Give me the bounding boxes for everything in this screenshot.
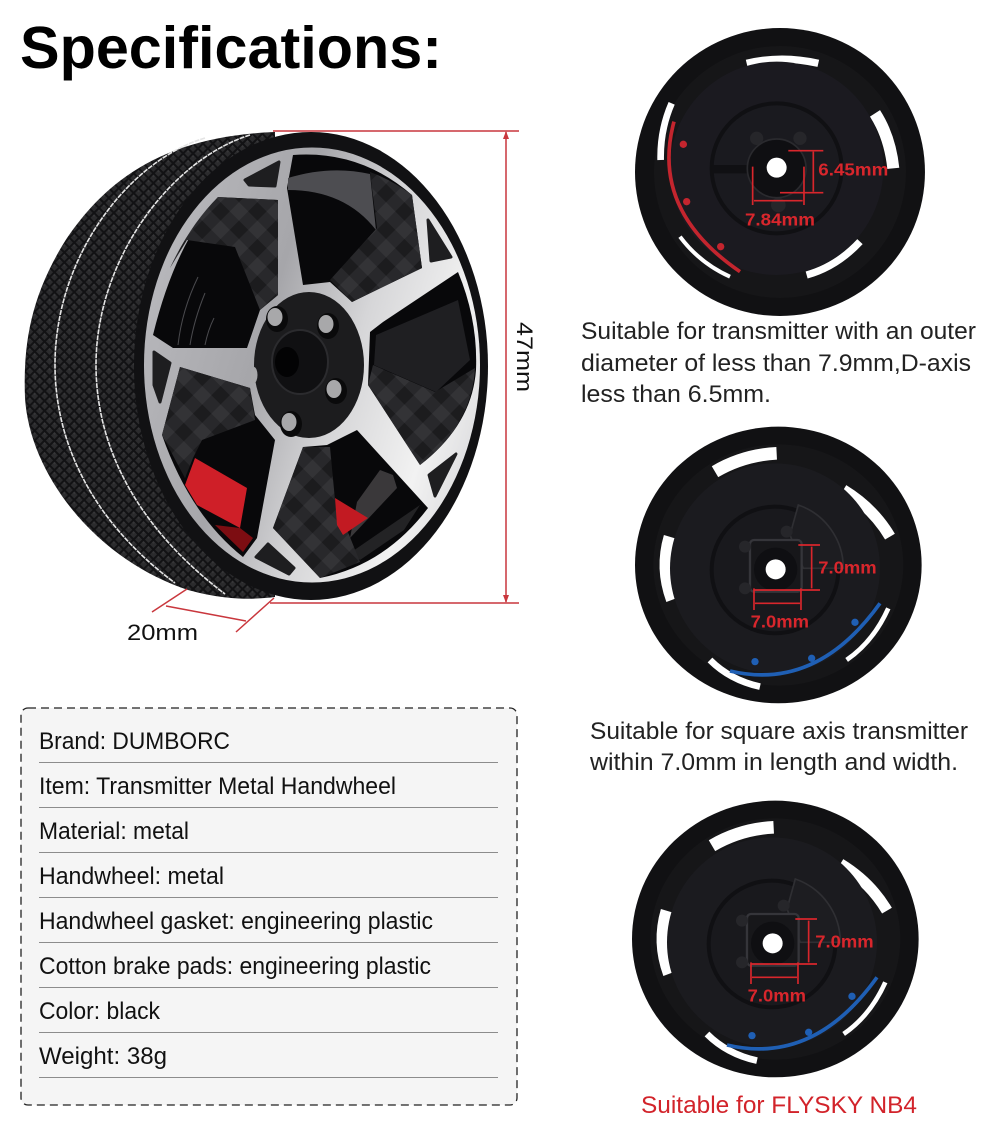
spec rows: Cotton brake pads: engineering plastic bbox=[39, 953, 431, 980]
gasket photo 1: red, D-axis: 7.84mm bbox=[745, 210, 815, 230]
dimension: 20mm width: 20mm bbox=[127, 620, 198, 645]
silver face with spokes bbox=[144, 148, 480, 582]
gasket photo 3: blue, FLYSKY NB4 bbox=[632, 801, 919, 1077]
spec rows: Material: metal bbox=[39, 818, 189, 845]
spec rows: Color: black bbox=[39, 998, 161, 1025]
small triangular windows bbox=[154, 162, 456, 574]
center hub bbox=[250, 292, 364, 438]
caption 1 bbox=[581, 318, 976, 408]
caption 1: Suitable for transmitter with an outer bbox=[581, 318, 976, 345]
inner glossy details bbox=[178, 170, 470, 560]
spec rows: Handwheel gasket: engineering plastic bbox=[39, 908, 433, 935]
dimension: 20mm width bbox=[127, 589, 274, 645]
gasket photo 3: blue, FLYSKY NB4: 7.0mm bbox=[748, 986, 806, 1006]
caption 2: within 7.0mm in length and width. bbox=[589, 749, 958, 776]
gasket photo 2: blue, square axis: 7.0mm bbox=[818, 557, 877, 577]
gasket photo 2: blue, square axis bbox=[635, 427, 922, 703]
gasket photo 1: red, D-axis bbox=[635, 28, 925, 316]
caption 3: Suitable for FLYSKY NB4 bbox=[641, 1092, 917, 1119]
gasket photo 3: blue, FLYSKY NB4: 7.0mm bbox=[815, 931, 874, 951]
spec rows: Handwheel: metal bbox=[39, 863, 224, 890]
gasket photo 2: blue, square axis: 7.0mm bbox=[751, 612, 809, 632]
red brake calipers bbox=[185, 458, 368, 552]
caption 1: less than 6.5mm. bbox=[581, 381, 771, 408]
product photo: handwheel bbox=[25, 132, 488, 600]
caption 2 bbox=[589, 718, 968, 776]
gasket photo 1: red, D-axis: 6.45mm bbox=[818, 159, 888, 179]
caption 2: Suitable for square axis transmitter bbox=[590, 718, 968, 745]
dimension: 47mm height bbox=[270, 131, 537, 603]
dimension: 47mm height: 47mm bbox=[512, 322, 537, 392]
wheel windows bbox=[153, 154, 476, 578]
white stripes on tire bbox=[55, 135, 250, 594]
carbon fibre panels bbox=[162, 172, 475, 578]
spec rows bbox=[39, 728, 433, 1070]
spec rows: Brand: DUMBORC bbox=[39, 728, 230, 755]
caption 1: diameter of less than 7.9mm,D-axis bbox=[581, 350, 971, 377]
spec rows: Weight: 38g bbox=[39, 1043, 167, 1070]
spec rows: Item: Transmitter Metal Handwheel bbox=[39, 773, 396, 800]
black rim bbox=[134, 132, 488, 600]
spec table bbox=[21, 708, 517, 1105]
title: Specifications: bbox=[20, 15, 442, 81]
knurled tire body bbox=[25, 132, 275, 599]
